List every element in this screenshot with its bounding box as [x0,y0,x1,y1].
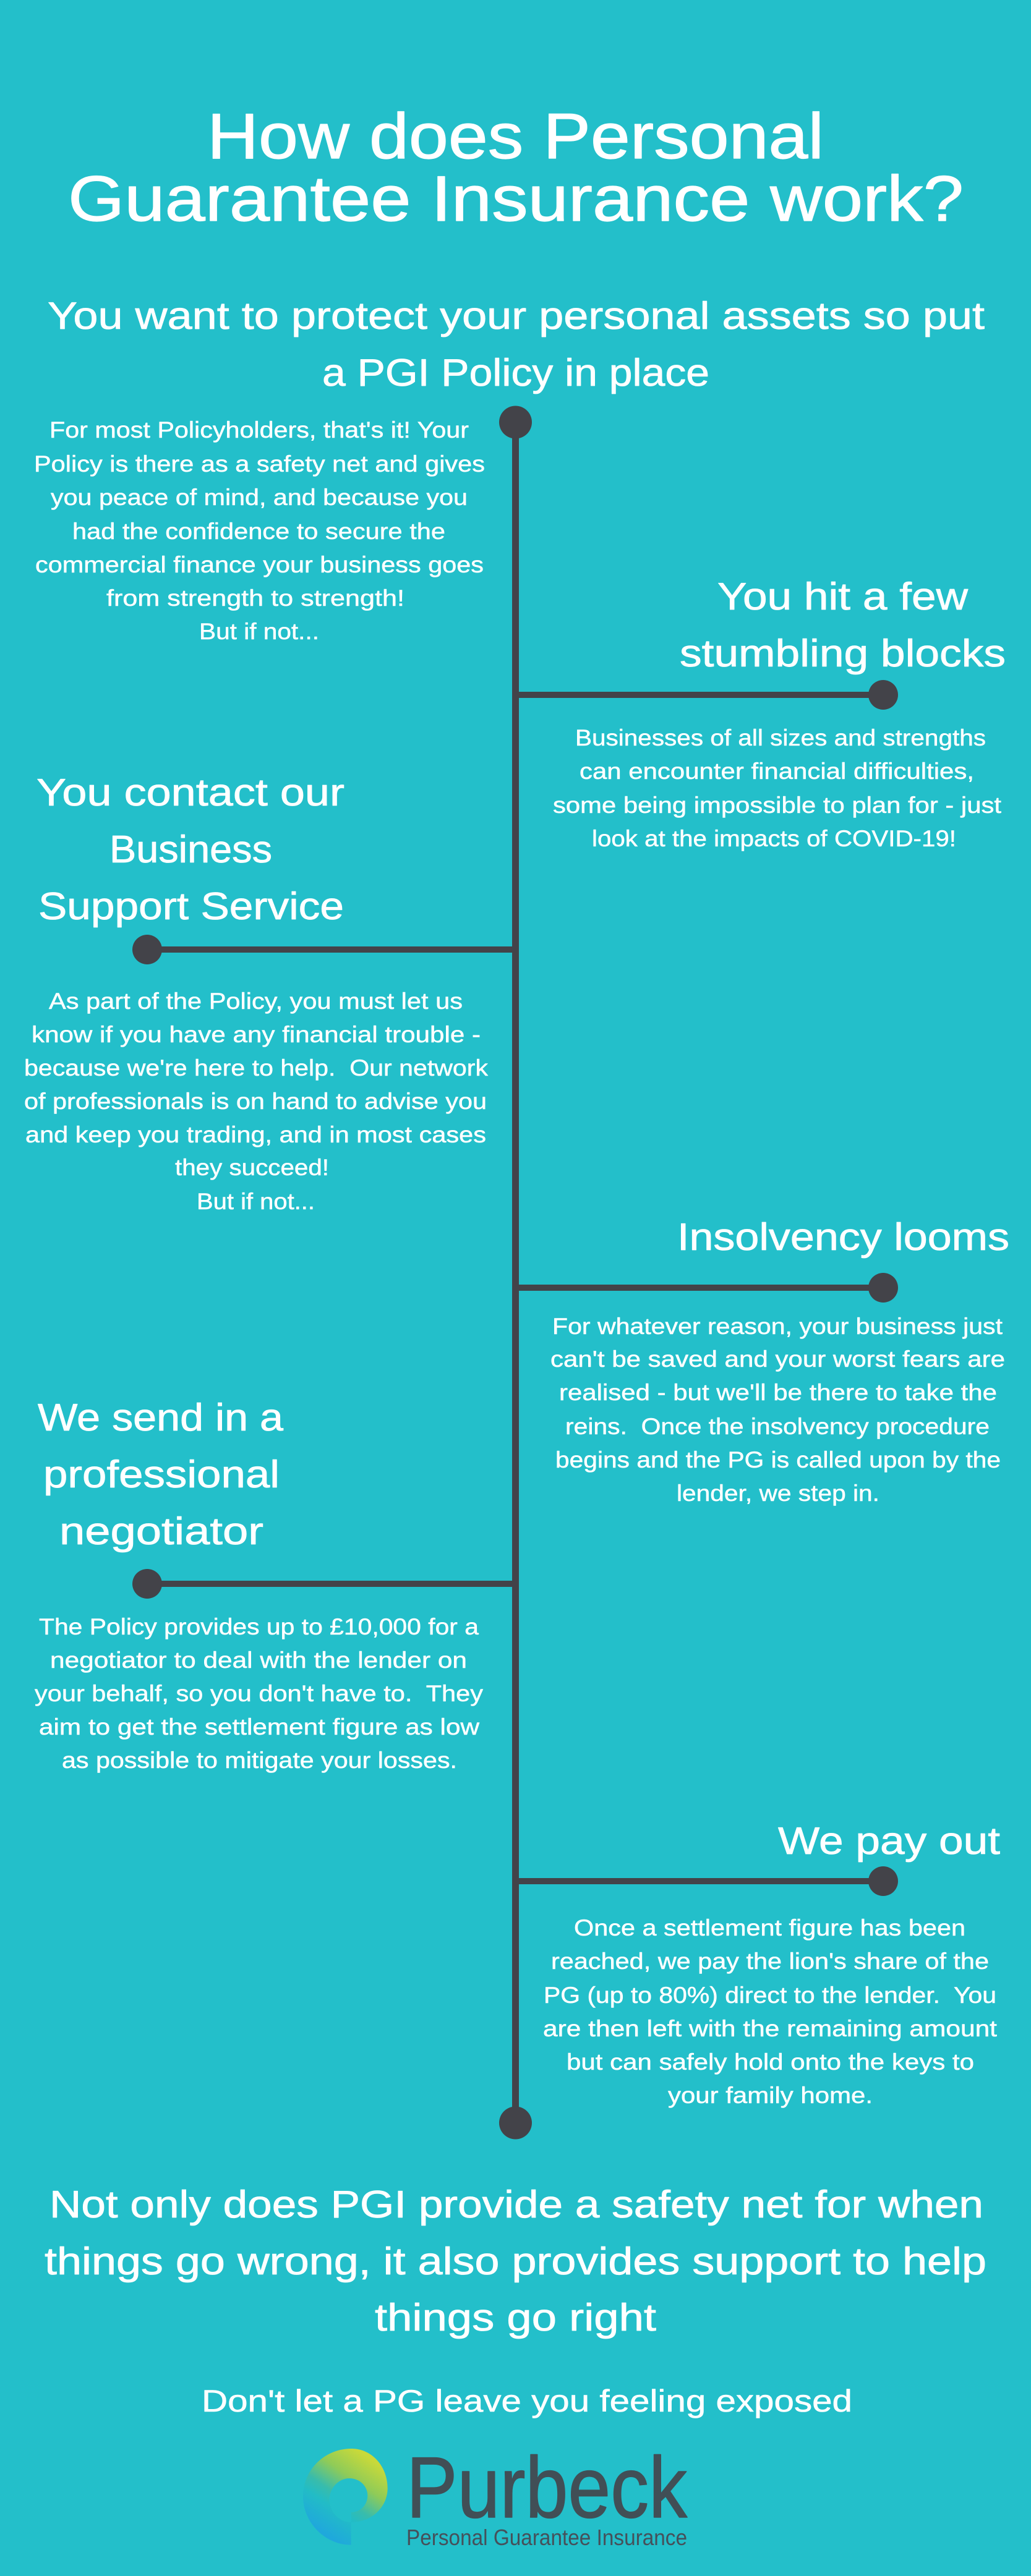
text block: insolvency looms: For whatever reason, your business just [552,1314,1003,1339]
closing statement: Not only does PGI provide a safety net for when [49,2183,983,2226]
text block: business support service: of professionals is on hand to advise you [24,1089,487,1114]
text block: business support service: because we're here to help. Our network [24,1055,489,1081]
heading: insolvency looms: Insolvency looms [677,1216,1009,1259]
text block: most policyholders: you peace of mind, and because you [51,485,468,510]
text block: insolvency looms: lender, we step in. [677,1481,879,1506]
title: Guarantee Insurance work? [68,163,964,235]
text block: most policyholders: had the confidence to secure the [72,519,445,544]
text block: most policyholders: For most Policyholders, that's it! Your [49,417,469,443]
text block: insolvency looms: can't be saved and your worst fears are [550,1346,1005,1372]
text block: insolvency looms: realised - but we'll be there to take the [559,1380,997,1405]
text block: business support service: As part of the Policy, you must let us [49,988,463,1014]
text block: professional negotiator: The Policy provides up to £10,000 for a [39,1614,479,1639]
text block: business support service: and keep you trading, and in most cases [25,1122,486,1147]
dot: stumbling blocks [868,680,898,710]
title: How does Personal [207,101,824,172]
text block: professional negotiator: negotiator to deal with the lender on [50,1647,467,1673]
text block: we pay out: PG (up to 80%) direct to the lender. You [544,1983,996,2008]
end dot [499,2107,532,2139]
heading: stumbling blocks [680,576,1006,675]
dot: negotiator [132,1569,162,1599]
text block: we pay out: are then left with the remaining amount [543,2016,998,2041]
heading: professional negotiator: professional [43,1453,280,1496]
text block: we pay out: your family home. [668,2083,873,2108]
title [68,101,964,235]
branch: pay out [515,1878,883,1884]
branch: stumbling blocks [515,692,883,698]
text block: stumbling blocks: Businesses of all sizes and strengths [575,725,986,750]
text block: most policyholders [34,417,485,644]
heading: stumbling blocks: stumbling blocks [680,632,1006,675]
tagline: Don't let a PG leave you feeling exposed [202,2384,852,2418]
heading: business support service: You contact our [36,772,344,814]
timeline [132,406,898,2139]
text block: business support service: But if not... [197,1189,315,1214]
text block: business support service [24,988,489,1214]
dot: insolvency [868,1273,898,1303]
logo wordmark: Purbeck [406,2439,688,2536]
text block: professional negotiator: your behalf, so you don't have to. They [35,1681,484,1706]
closing statement: things go wrong, it also provides support to help [45,2240,986,2283]
branch: insolvency [515,1285,883,1291]
heading: protect your personal assets: You want to protect your personal assets so put [48,295,985,338]
heading: business support service [36,772,344,928]
dot: pay out [868,1866,898,1896]
heading: professional negotiator [38,1396,284,1553]
panel: stumbling blocks [553,576,1006,851]
text block: most policyholders: from strength to strength! [106,585,404,611]
heading: professional negotiator: negotiator [59,1510,263,1553]
heading: protect your personal assets [48,295,985,394]
text block: most policyholders: commercial finance your business goes [35,552,484,577]
panel: business support service [24,772,489,1214]
text block: most policyholders: But if not... [199,619,319,644]
text block: stumbling blocks: some being impossible to plan for - just [553,793,1002,818]
heading: stumbling blocks: You hit a few [717,576,968,618]
text block: professional negotiator [35,1614,484,1773]
timeline spine [512,422,519,2123]
text block: insolvency looms: reins. Once the insolvency procedure [565,1414,990,1439]
text block: professional negotiator: as possible to mitigate your losses. [62,1748,457,1773]
panel: we pay out [543,1820,1000,2108]
closing statement [45,2183,986,2339]
dot: business support [132,935,162,964]
text block: stumbling blocks: look at the impacts of COVID-19! [592,826,956,851]
heading: protect your personal assets: a PGI Policy in place [322,352,709,394]
text block: stumbling blocks [553,725,1002,851]
heading: professional negotiator: We send in a [38,1396,284,1439]
text block: stumbling blocks: can encounter financial difficulties, [580,759,974,784]
text block: business support service: know if you have any financial trouble - [32,1022,481,1047]
text block: we pay out: but can safely hold onto the keys to [567,2049,974,2075]
text block: we pay out: Once a settlement figure has been [574,1915,965,1941]
text block: insolvency looms: begins and the PG is called upon by the [555,1447,1001,1473]
closing statement: things go right [375,2297,656,2339]
panel: professional negotiator [35,1396,484,1773]
branch: business support [147,946,515,953]
text block: we pay out: reached, we pay the lion's share of the [551,1949,989,1974]
start dot [499,406,532,439]
text block: we pay out [543,1915,998,2108]
logo: Purbeck [303,2439,688,2550]
branch: negotiator [147,1581,515,1587]
heading: business support service: Business [109,828,272,871]
text block: insolvency looms [550,1314,1005,1506]
text block: business support service: they succeed! [175,1155,329,1180]
text block: most policyholders: Policy is there as a safety net and gives [34,451,485,477]
panel: insolvency looms [550,1216,1009,1506]
text block: professional negotiator: aim to get the settlement figure as low [39,1714,479,1740]
heading: we pay out: We pay out [778,1820,1000,1863]
logo tagline: Personal Guarantee Insurance [406,2525,687,2550]
heading: business support service: Support Service [38,885,344,928]
icon: Purbeck swirl [303,2449,388,2545]
